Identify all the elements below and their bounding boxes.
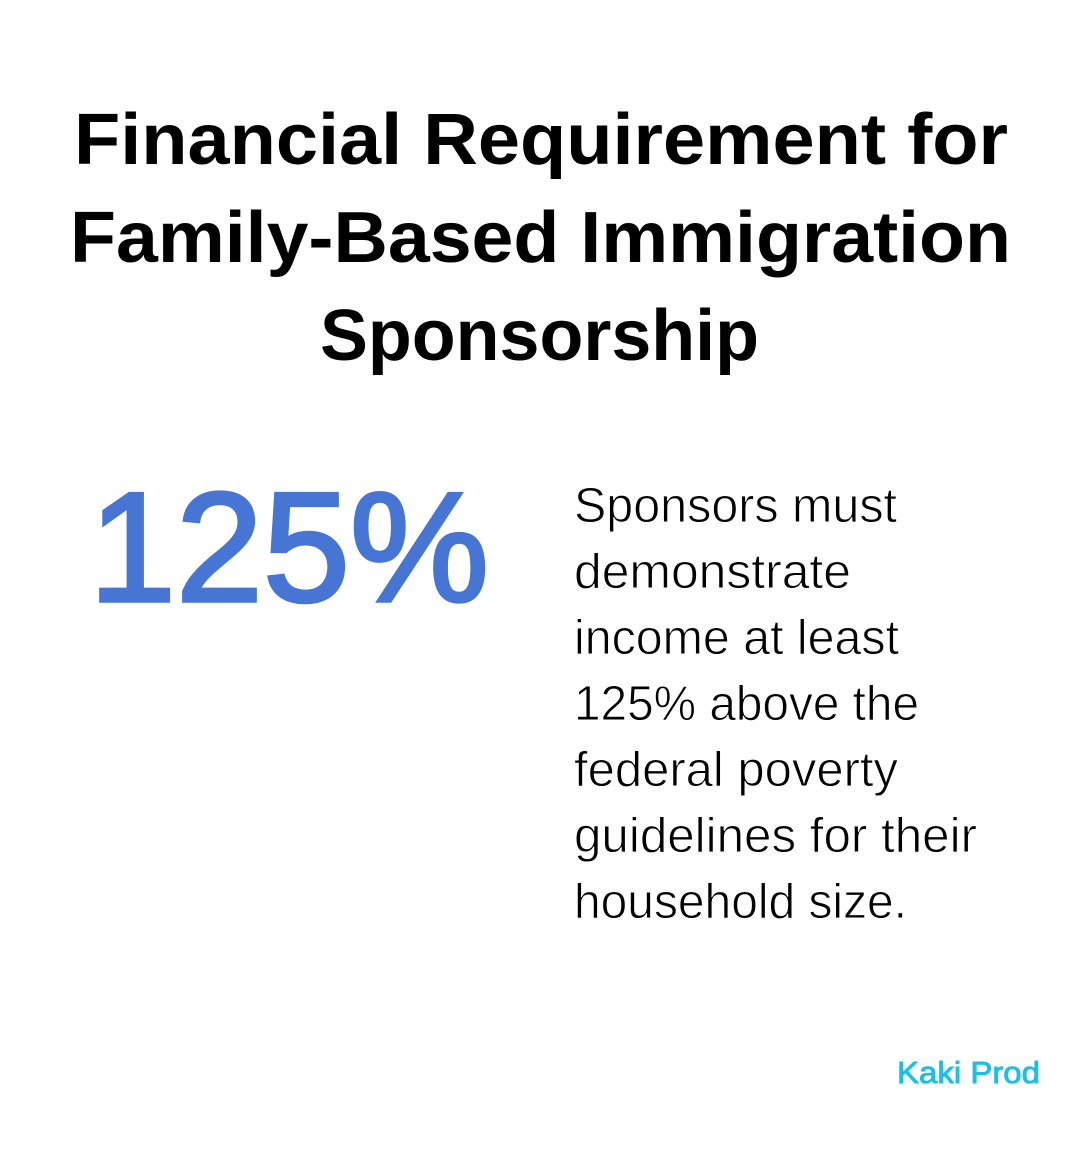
logo: Kaki Prod: Kaki Prod	[897, 1055, 1040, 1090]
title: Family-Based Immigration	[70, 198, 1011, 278]
description text: 125% above the	[574, 677, 919, 731]
description text	[574, 479, 977, 929]
big statistic: 125%: 125%	[89, 461, 489, 635]
title	[70, 100, 1011, 376]
title: Sponsorship	[320, 296, 759, 376]
description text: guidelines for their	[574, 809, 977, 863]
description text: federal poverty	[574, 743, 898, 797]
description text: income at least	[574, 611, 899, 665]
description text: household size.	[574, 875, 907, 929]
description text: Sponsors must	[574, 479, 897, 533]
description text: demonstrate	[574, 545, 851, 599]
title: Financial Requirement for	[74, 100, 1008, 180]
